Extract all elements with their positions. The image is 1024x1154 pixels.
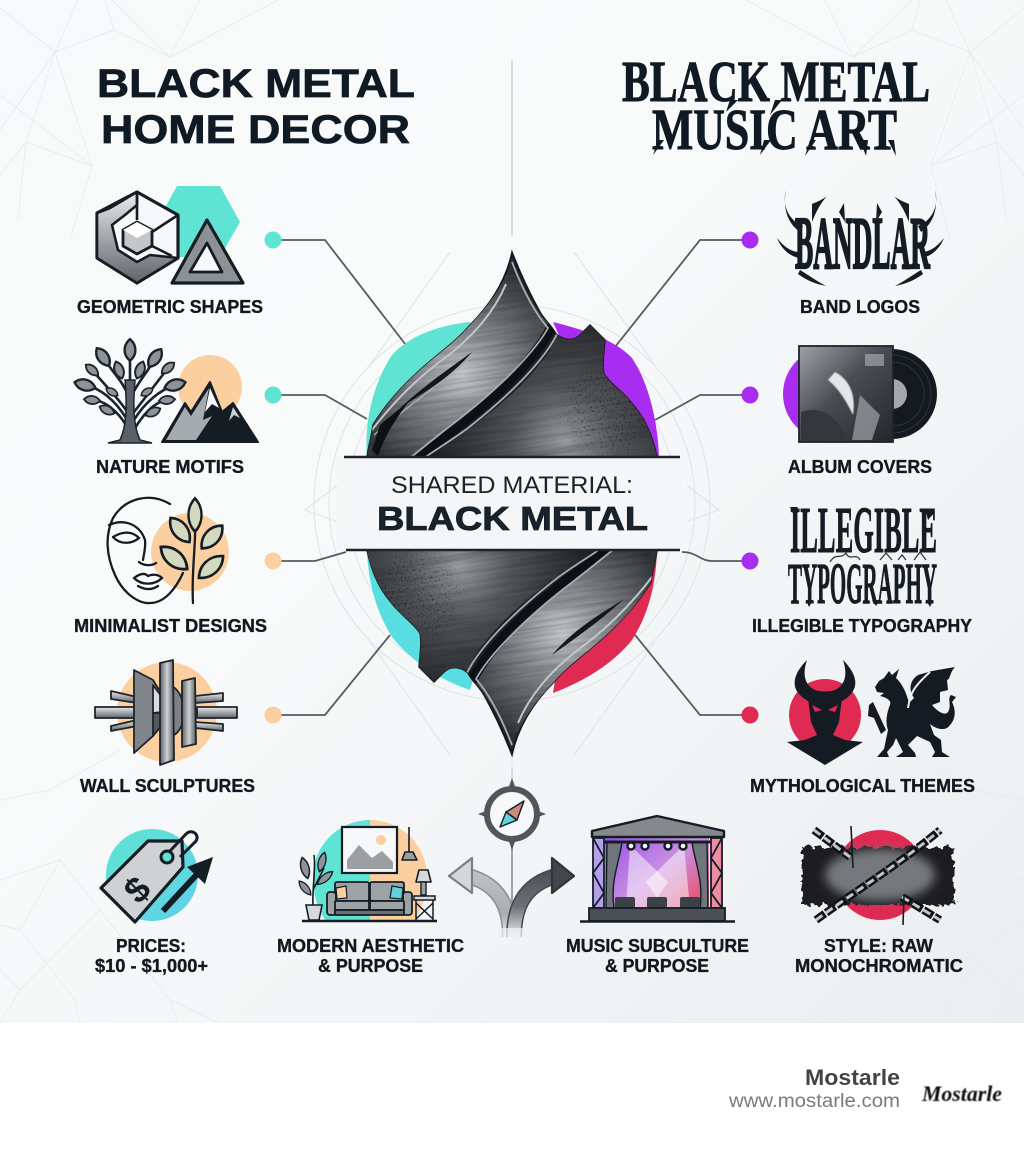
icon: geometric shapes	[97, 186, 243, 283]
icon: wall sculpture	[95, 660, 237, 765]
label: MYTHOLOGICAL THEMES	[750, 775, 975, 796]
icon: distressed chains	[802, 826, 954, 925]
label: ILLEGIBLE TYPOGRAPHY	[752, 615, 973, 636]
item: illegible typography	[752, 494, 973, 636]
label	[566, 935, 749, 976]
item: music subculture	[566, 816, 749, 976]
icon: tree and mountains	[73, 339, 258, 443]
label: & PURPOSE	[318, 955, 423, 976]
connectors: home decor	[273, 240, 409, 715]
title: black metal home decor: HOME DECOR	[101, 108, 410, 152]
metal upper half	[366, 250, 658, 456]
title: black metal music art: MUSIC ART	[652, 97, 897, 162]
icon: compass and forked arrows	[449, 768, 574, 938]
center divider	[511, 60, 513, 236]
colour blobs behind metal	[366, 322, 659, 693]
label	[795, 935, 963, 976]
central band	[337, 457, 687, 550]
footer	[0, 1023, 1024, 1154]
label: NATURE MOTIFS	[96, 456, 244, 477]
metal lower half	[366, 551, 658, 758]
label	[95, 935, 208, 976]
label	[277, 935, 464, 976]
connectors: music art	[615, 240, 750, 715]
label: MODERN AESTHETIC	[277, 935, 464, 956]
item: style raw monochromatic	[795, 826, 963, 976]
icon: living room	[297, 820, 437, 921]
item: modern aesthetic	[277, 820, 464, 976]
band heading: BLACK METAL	[377, 500, 648, 537]
label: MONOCHROMATIC	[795, 955, 963, 976]
icon: face and plant	[108, 498, 229, 603]
item: band logos	[777, 190, 944, 317]
band heading: SHARED MATERIAL:	[391, 472, 633, 499]
label: & PURPOSE	[605, 955, 709, 976]
item: wall sculptures	[80, 660, 255, 796]
item: album covers	[783, 346, 937, 477]
label: $10 - $1,000+	[95, 955, 208, 976]
label: ALBUM COVERS	[788, 456, 932, 477]
icon: price tag	[101, 829, 213, 922]
label: STYLE: RAW	[824, 935, 934, 956]
label: WALL SCULPTURES	[80, 775, 255, 796]
item: geometric shapes	[77, 186, 263, 317]
title: black metal home decor: BLACK METAL	[97, 62, 415, 106]
label: GEOMETRIC SHAPES	[77, 296, 263, 317]
icon: band logo	[777, 190, 944, 286]
title: black metal home decor	[97, 62, 415, 152]
icon: demon and dragon	[787, 660, 956, 765]
label: MINIMALIST DESIGNS	[74, 615, 267, 636]
item: nature motifs	[73, 339, 258, 477]
item: prices	[95, 829, 213, 976]
footer logo: Mostarle	[921, 1081, 1002, 1106]
item: mythological themes	[750, 660, 975, 796]
node dots: home decor	[264, 232, 282, 724]
label: BAND LOGOS	[800, 296, 920, 317]
icon: vinyl album	[783, 346, 937, 442]
icon: concert stage	[580, 816, 735, 922]
central metal emblem	[337, 230, 687, 777]
band heading	[377, 472, 648, 537]
footer brand name: Mostarle	[805, 1065, 900, 1090]
label: PRICES:	[116, 935, 186, 956]
icon: price tag: $	[115, 868, 159, 911]
icon: illegible type	[788, 494, 937, 616]
label: MUSIC SUBCULTURE	[566, 935, 749, 956]
footer url: www.mostarle.com	[728, 1091, 900, 1112]
central mandala	[305, 252, 719, 790]
node dots: music art	[742, 232, 758, 724]
item: minimalist designs	[74, 498, 267, 636]
title: black metal music art	[622, 49, 930, 162]
